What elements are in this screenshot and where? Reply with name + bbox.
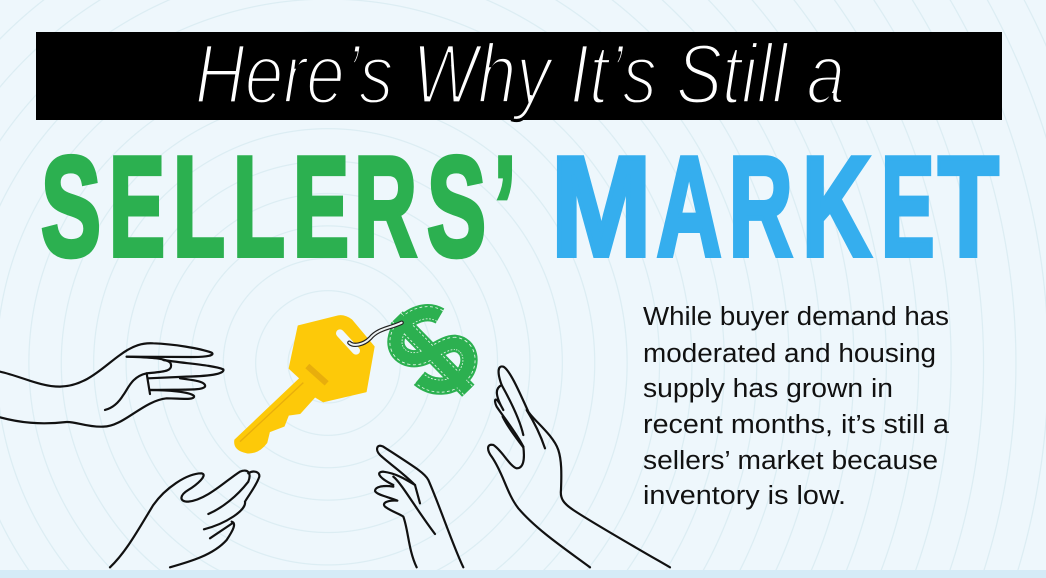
icon: key ring wire bbox=[349, 323, 402, 345]
icon: left hand reaching bbox=[0, 343, 223, 427]
body text block: supply has grown in bbox=[643, 375, 893, 403]
icon: yellow key bbox=[235, 316, 374, 453]
heading: SELLERS': E bbox=[293, 128, 349, 286]
body text block: While buyer demand has bbox=[643, 303, 949, 331]
body text block: recent months, it’s still a bbox=[643, 411, 950, 439]
title line: Here's Why It's Still a: Here’s Why It’s Still a bbox=[195, 27, 845, 121]
body text block: sellers’ market because bbox=[643, 447, 938, 475]
body text block: inventory is low. bbox=[643, 482, 846, 510]
heading: SELLERS': R bbox=[354, 128, 417, 286]
heading: SELLERS': E bbox=[109, 128, 165, 286]
icon: right hand raised bbox=[488, 366, 670, 567]
bottom band bbox=[0, 570, 1046, 578]
icon: green dollar sign bbox=[396, 313, 469, 391]
heading: MARKET: K bbox=[802, 128, 871, 286]
heading: MARKET: R bbox=[729, 128, 793, 286]
heading: SELLERS': ’ bbox=[494, 128, 516, 286]
heading: MARKET: T bbox=[938, 128, 999, 286]
body text block: moderated and housing bbox=[643, 340, 936, 368]
body text block bbox=[643, 303, 950, 510]
heading: MARKET: E bbox=[881, 128, 934, 286]
heading: MARKET: M bbox=[551, 128, 652, 286]
heading: SELLERS': S bbox=[41, 128, 101, 286]
heading: SELLERS': L bbox=[173, 128, 225, 286]
heading: SELLERS': S bbox=[427, 128, 486, 286]
icon: lower left hand bbox=[110, 471, 259, 567]
title banner bbox=[36, 27, 1002, 121]
icon: lower centre hand bbox=[375, 446, 463, 567]
heading: MARKET: A bbox=[657, 128, 722, 286]
heading: SELLERS': L bbox=[233, 128, 285, 286]
